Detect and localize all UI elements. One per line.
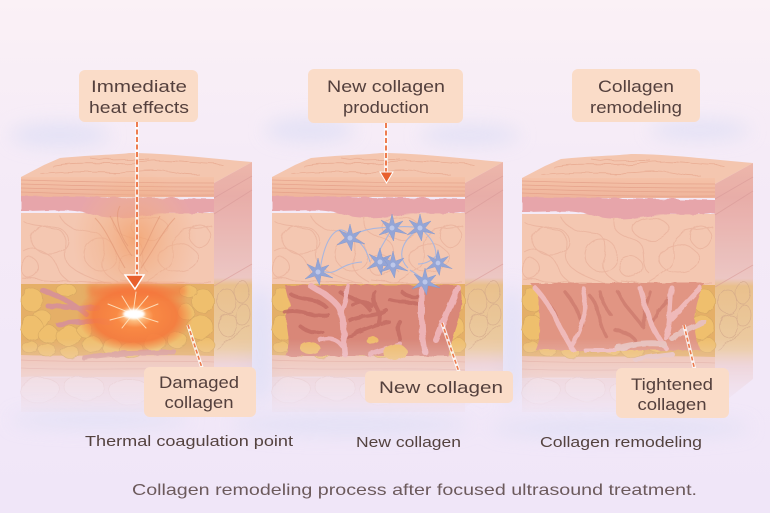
callout: collagen remodeling	[572, 69, 700, 122]
callout: collagen remodeling: Collagen	[598, 78, 674, 96]
panel: thermal coagulation block	[20, 153, 252, 412]
callout: damaged collagen: collagen	[164, 394, 234, 412]
skin layers right	[521, 154, 753, 413]
panel: collagen remodeling block	[521, 154, 753, 413]
caption: collagen remodeling: Collagen remodeling	[540, 434, 702, 451]
callout: collagen remodeling: remodeling	[590, 99, 682, 117]
arrow: heat into thermal point	[125, 122, 144, 289]
callout: tightened collagen: Tightened	[631, 376, 713, 394]
callout: immediate heat effects	[79, 70, 198, 122]
callout: new collagen: New collagen	[379, 379, 503, 397]
skin layers middle	[271, 153, 503, 412]
arrow: new collagen production	[380, 123, 393, 183]
panel: new collagen block	[271, 153, 503, 412]
callout: immediate heat effects: heat effects	[89, 99, 189, 117]
callout: immediate heat effects: Immediate	[91, 78, 187, 96]
callout: damaged collagen: Damaged	[159, 374, 239, 392]
callout: new collagen production: production	[343, 99, 429, 117]
callout: tightened collagen: collagen	[638, 396, 706, 414]
thermal burst	[77, 280, 193, 352]
callout: new collagen production: New collagen	[327, 78, 445, 96]
callout: damaged collagen	[144, 367, 256, 417]
caption: new collagen: New collagen	[356, 434, 461, 451]
leader: tightened collagen	[684, 325, 696, 375]
callout: new collagen	[365, 371, 513, 403]
callout: tightened collagen	[616, 368, 729, 418]
leader: new collagen	[442, 323, 459, 372]
skin layers left	[20, 153, 252, 412]
leader: damaged collagen	[188, 325, 202, 368]
fibroblasts	[305, 214, 452, 295]
footer caption: Collagen remodeling process after focused ultrasound treatment.	[132, 482, 697, 499]
caption: thermal coagulation point: Thermal coagulation point	[85, 433, 294, 450]
callout: new collagen production	[308, 69, 463, 123]
